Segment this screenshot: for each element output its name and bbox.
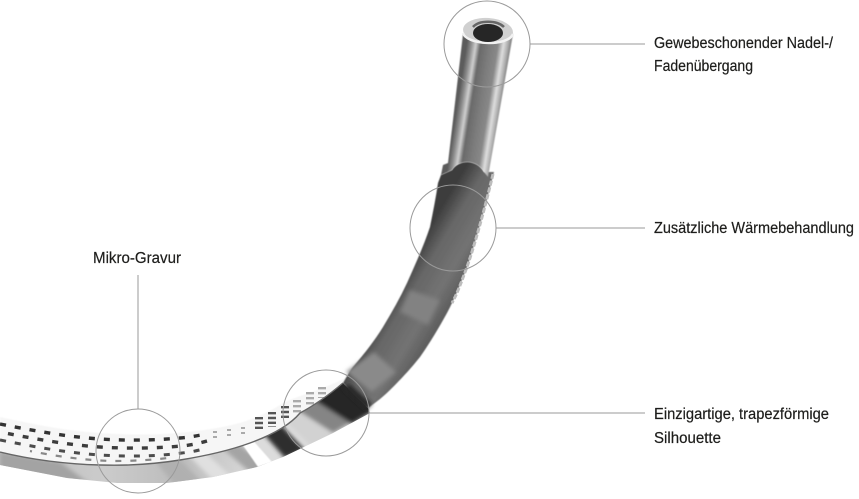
callout: micro engraving xyxy=(96,275,180,493)
label: Gewebeschonender Nadel-/Fadenübergang xyxy=(654,35,834,75)
callout: trapezoid silhouette xyxy=(283,370,645,456)
label: Mikro-Gravur: Mikro-Gravur xyxy=(93,250,181,267)
needle: hollow shaft xyxy=(441,16,514,177)
label: Gewebeschonender Nadel-/Fadenübergang: Fadenübergang xyxy=(654,58,753,75)
label: Einzigartige, trapezförmige Silhouette: Einzigartige, trapezförmige xyxy=(654,406,829,423)
label: Gewebeschonender Nadel-/Fadenübergang: Gewebeschonender Nadel-/ xyxy=(654,35,834,52)
needle illustration xyxy=(0,16,514,495)
needle: heat treated dark section xyxy=(342,162,494,410)
label: Einzigartige, trapezförmige Silhouette: Silhouette xyxy=(654,430,721,447)
callout: heat treatment xyxy=(410,185,645,271)
label: Einzigartige, trapezförmige Silhouette xyxy=(654,406,829,447)
callout: needle-thread transition xyxy=(444,1,645,87)
needle: ridge line xyxy=(0,383,343,465)
needle: textured inner band with micro engraving xyxy=(0,377,347,465)
needle: silver trapezoid underside xyxy=(0,383,370,483)
